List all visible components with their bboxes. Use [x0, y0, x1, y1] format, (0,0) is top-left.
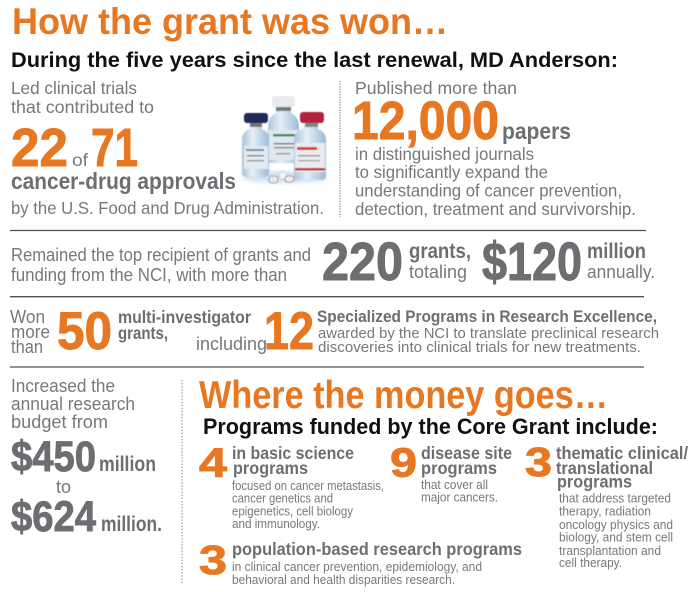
panel: multi-investigator grants — [10, 302, 659, 361]
text: top recipient — [11, 245, 311, 285]
label: in basic science — [232, 443, 354, 463]
subheading: programs funded: Programs funded by the Core Grant include: — [203, 414, 658, 439]
right vial — [294, 112, 326, 180]
label: thematic clinical/ — [556, 443, 688, 463]
description text: in distinguished journals — [355, 144, 534, 164]
description text: oncology physics and — [559, 517, 673, 532]
text: won more than: than — [11, 337, 43, 357]
stoppers — [269, 172, 294, 183]
text: including: including — [196, 334, 267, 354]
stat: $450 million — [11, 433, 156, 481]
stat: $450 million: million — [99, 453, 156, 476]
description text: cell therapy. — [559, 555, 622, 570]
label: grants totaling — [409, 239, 471, 282]
description text: and immunology. — [232, 516, 320, 531]
description text: epigenetics, cell biology — [232, 504, 353, 519]
stat: $624 million — [11, 493, 162, 541]
label: programs — [233, 458, 308, 478]
stat: 22 of 71 — [11, 118, 138, 178]
description text: biology, and stem cell — [559, 530, 673, 545]
label: multi-investigator grants — [118, 307, 251, 343]
text: top recipient: funding from the NCI, with more than — [11, 265, 287, 285]
title: how the grant was won: How the grant was won… — [12, 0, 448, 42]
intro text — [11, 376, 135, 432]
label: specialized programs: Specialized Programs in Research Excellence, — [317, 307, 657, 326]
icon: drug vials photo — [242, 96, 327, 183]
description text: detection, treatment and survivorship. — [355, 199, 636, 219]
label: multi-investigator grants: multi-investigator — [118, 307, 251, 327]
label: programs — [557, 472, 632, 492]
stat: 12,000: 12,000 — [352, 91, 499, 151]
panel: disease site programs — [390, 440, 512, 505]
stat: 3: 3 — [199, 537, 227, 583]
label: million annually: annually. — [587, 262, 655, 282]
text: won more than: Won — [10, 307, 45, 327]
panel: basic science programs — [199, 440, 384, 531]
panel: thematic programs — [525, 439, 688, 570]
label — [232, 443, 354, 478]
panel: research budget — [11, 376, 162, 541]
label: grants totaling: grants, — [409, 239, 471, 263]
description text — [232, 478, 384, 531]
intro text: Led clinical trials — [11, 78, 137, 98]
label: disease site — [421, 443, 512, 463]
intro text: Published more than — [355, 78, 517, 98]
stat: 22 of 71: 71 — [91, 118, 138, 178]
stat: 3: 3 — [525, 439, 552, 485]
description text: in clinical cancer prevention, epidemiology, and — [232, 559, 482, 574]
description text: discoveries into clinical trials for new treatments. — [318, 340, 641, 356]
label: papers: papers — [502, 118, 571, 144]
description text: understanding of cancer prevention, — [355, 180, 622, 200]
stat: 220: 220 — [322, 232, 403, 292]
stat: 12: 12 — [264, 302, 314, 361]
label: grants totaling: totaling — [409, 262, 467, 282]
stat: 9: 9 — [390, 440, 417, 486]
heading: where the money goes: Where the money goes… — [199, 374, 608, 417]
description text: that address targeted — [559, 491, 671, 506]
description text — [355, 144, 636, 219]
panel: NCI funding — [11, 232, 655, 292]
description text: awarded by the NCI to translate preclinical research — [318, 326, 659, 342]
description text — [318, 326, 659, 356]
description text: cancer genetics and — [232, 491, 333, 506]
description text: focused on cancer metastasis, — [232, 478, 384, 493]
stat: $120: $120 — [482, 232, 582, 292]
stat: 50: 50 — [57, 302, 112, 361]
text: by the FDA: by the U.S. Food and Drug Administration. — [11, 198, 324, 218]
panel: publications — [352, 78, 636, 219]
divider: dotted vertical bottom — [181, 380, 183, 583]
text: won more than: more — [11, 322, 50, 342]
intro text: that contributed to — [11, 97, 154, 117]
description text: behavioral and health disparities research. — [232, 572, 455, 587]
panel: drug approvals — [11, 78, 324, 218]
intro text: budget from — [11, 412, 108, 432]
description text: transplantation and — [559, 543, 661, 558]
label — [421, 443, 512, 478]
label: population-based research programs — [232, 539, 522, 559]
description text: that cover all — [421, 477, 488, 492]
subheading: during the five years: During the five years since the last renewal, MD Anderson: — [11, 48, 618, 72]
label: programs — [421, 458, 497, 478]
description text — [559, 491, 673, 570]
stat: $624 million: million. — [101, 513, 162, 536]
description text: major cancers. — [421, 490, 498, 505]
description text — [421, 477, 498, 505]
label — [556, 443, 688, 492]
label: multi-investigator grants: grants, — [118, 323, 168, 343]
text: won more than — [10, 307, 50, 357]
text: top recipient: Remained the top recipient of grants and — [11, 245, 311, 265]
label: translational — [556, 458, 653, 478]
intro text: Increased the — [11, 376, 115, 396]
description text: therapy, radiation — [559, 504, 651, 519]
intro text: annual research — [11, 394, 135, 414]
panel: population-based programs — [199, 537, 522, 587]
divider: dotted vertical top — [339, 81, 341, 217]
label: million annually — [587, 239, 655, 282]
stat: $450 million: $450 — [11, 433, 96, 481]
stat: 22 of 71: 22 — [11, 118, 68, 178]
description text — [232, 559, 482, 587]
stat: 22 of 71: of — [72, 150, 88, 170]
description text: to significantly expand the — [355, 162, 548, 182]
label: cancer-drug approvals: cancer-drug approvals — [11, 168, 236, 194]
text: to: to — [56, 477, 71, 497]
intro text — [11, 78, 154, 117]
stat: $624 million: $624 — [11, 493, 96, 541]
label: million annually: million — [587, 239, 646, 263]
stat: 4: 4 — [199, 440, 227, 486]
left vial — [242, 113, 269, 177]
centre vial — [268, 96, 299, 163]
